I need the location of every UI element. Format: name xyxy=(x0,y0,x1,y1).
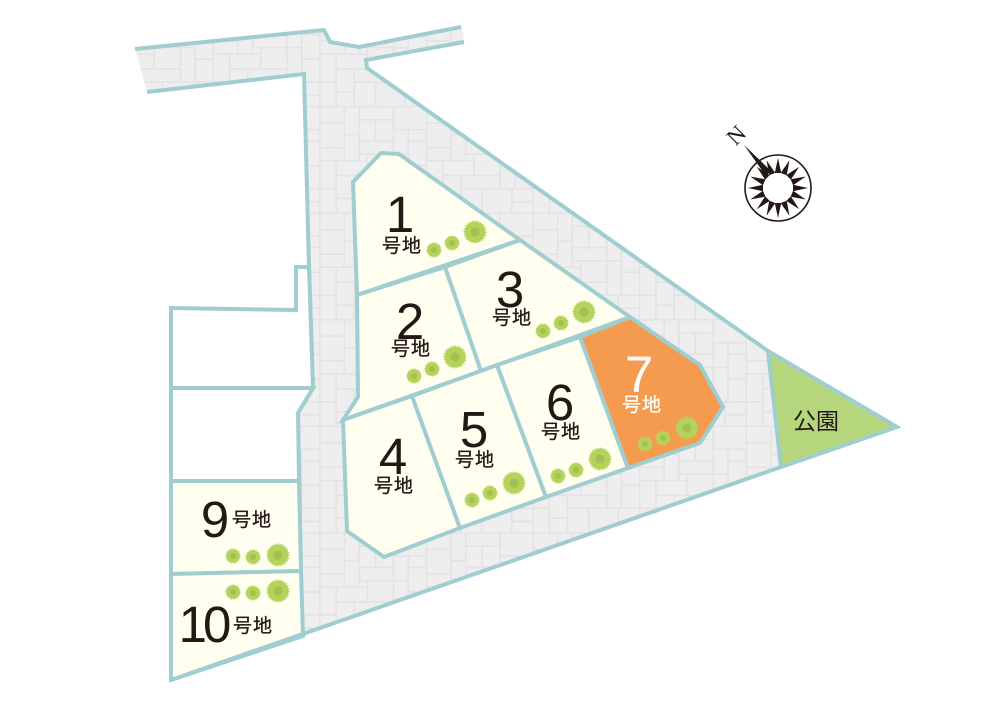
lot 9 xyxy=(171,481,301,574)
lot 9 number: 9 xyxy=(201,491,229,548)
lot 4 label: 号地 xyxy=(374,475,414,497)
lot 6 label: 号地 xyxy=(541,421,581,443)
north needle xyxy=(744,145,771,176)
lot 9 label: 号地 xyxy=(232,509,272,531)
paved road area xyxy=(135,27,781,635)
compass rose xyxy=(748,158,808,218)
lot 5 trees xyxy=(465,472,525,507)
lot 6 xyxy=(497,337,628,497)
lot 4 xyxy=(343,396,460,557)
lot 6 number: 6 xyxy=(546,374,574,431)
lot 3 label: 号地 xyxy=(492,307,532,329)
lot 7 highlighted xyxy=(580,317,723,468)
compass xyxy=(722,120,811,221)
lot 10 xyxy=(171,571,303,680)
lot 10 label: 号地 xyxy=(233,615,273,637)
lot 7 trees xyxy=(638,417,698,451)
north letter: N xyxy=(722,120,751,150)
lot 3 number: 3 xyxy=(496,261,524,318)
lot 4 number: 4 xyxy=(379,428,407,485)
lot 2 number: 2 xyxy=(396,293,424,350)
lot 7 number: 7 xyxy=(625,346,653,403)
lot 3 xyxy=(445,240,630,371)
lot 2 label: 号地 xyxy=(391,338,431,360)
lot 1 trees xyxy=(427,221,486,257)
lot 1 label: 号地 xyxy=(382,235,422,257)
lot 10 number: 10 xyxy=(179,596,230,653)
bottom boundary line xyxy=(171,467,781,680)
park label: 公園 xyxy=(793,408,839,434)
park xyxy=(768,351,897,467)
lot 6 trees xyxy=(551,448,611,483)
lot 2 xyxy=(343,267,481,420)
lot 5 xyxy=(412,365,546,528)
lot 1 number: 1 xyxy=(386,186,414,243)
neighbouring white lots xyxy=(171,267,313,481)
lot 10 trees xyxy=(226,580,289,602)
lot 1 xyxy=(353,153,520,295)
lot 2 trees xyxy=(407,346,466,383)
lot 3 trees xyxy=(536,301,595,338)
lot 5 label: 号地 xyxy=(455,449,495,471)
lot 7 label: 号地 xyxy=(622,394,662,416)
lot 5 number: 5 xyxy=(460,401,488,458)
lot 9 trees xyxy=(226,544,289,566)
